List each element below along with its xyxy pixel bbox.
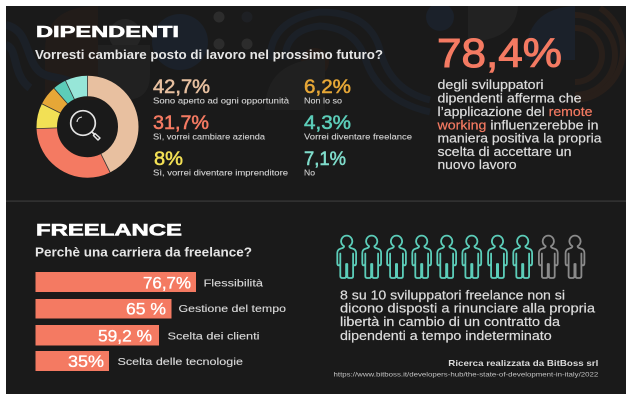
- stat: 31,7%: [153, 112, 266, 142]
- text block: freelance: dicono disposti a rinunciare alla propria: [340, 301, 596, 316]
- stat: 4,3%: [304, 112, 413, 142]
- text block: freelance: dipendenti a tempo indeterminato: [340, 328, 552, 343]
- text block: remote working: nuovo lavoro: [438, 157, 516, 172]
- stat: 6,2%: Non lo so: [304, 96, 343, 106]
- heading: question dipendenti: Vorresti cambiare posto di lavoro nel prossimo futuro?: [35, 48, 383, 62]
- stat: 31,7%: 31,7%: [153, 112, 209, 134]
- text block: remote working: degli sviluppatori: [438, 77, 544, 92]
- stat: 8%: Sì, vorrei diventare imprenditore: [153, 168, 289, 178]
- bar: Flessibilità: [36, 272, 264, 292]
- text block: freelance: 8 su 10 sviluppatori freelance non si: [340, 287, 565, 302]
- text block: freelance: [340, 287, 596, 343]
- stat: 7,1%: 7,1%: [304, 148, 346, 170]
- bar: Scelta dei clienti: 59,2 %: [98, 328, 152, 346]
- stat: 8%: [153, 148, 289, 178]
- bar: Gestione del tempo: [36, 299, 287, 318]
- text block: remote working: dipendenti afferma che: [438, 90, 582, 106]
- stat: 42,7%: 42,7%: [153, 76, 210, 98]
- text block: freelance: libertà in cambio di un contratto da: [340, 314, 561, 329]
- stat: 42,7%: Sono aperto ad ogni opportunità: [153, 96, 290, 106]
- icon: magnifying glass: [71, 111, 100, 140]
- credit: Ricerca realizzata da BitBoss srl: [448, 358, 598, 368]
- stat: 4,3%: Vorrei diventare freelance: [304, 132, 413, 142]
- bar: Scelta delle tecnologie: [36, 351, 244, 371]
- stat: 7,1%: No: [304, 168, 316, 178]
- text block: remote working: l’applicazione del remote: [438, 104, 592, 119]
- bar: Scelta delle tecnologie: 35%: [68, 353, 104, 371]
- title: Freelance: FREELANCE: [36, 222, 182, 240]
- text block: remote working: working influenzerebbe in: [436, 118, 598, 132]
- bar: Scelta dei clienti: [36, 325, 260, 346]
- title: Dipendenti: DIPENDENTI: [36, 24, 179, 41]
- stat: 6,2%: 6,2%: [304, 76, 351, 98]
- text block: remote working: maniera positiva la propria: [438, 130, 602, 146]
- stat: 42,7%: [153, 76, 290, 106]
- text block: remote working: [436, 77, 602, 172]
- text block: remote working: scelta di accettare un: [438, 144, 572, 159]
- stat: 31,7%: Sì, vorrei cambiare azienda: [153, 132, 266, 142]
- bar: Gestione del tempo: Gestione del tempo: [178, 304, 287, 315]
- bar: Gestione del tempo: 65 %: [126, 300, 166, 318]
- bar: Scelta delle tecnologie: Scelta delle tecnologie: [118, 357, 244, 368]
- source url: https://www.bitboss.it/developers-hub/the-state-of-development-in-italy/2022: [334, 372, 599, 379]
- bar: Scelta dei clienti: Scelta dei clienti: [168, 331, 260, 342]
- bar: Flessibilità: Flessibilità: [204, 279, 264, 290]
- stat: 8%: 8%: [154, 148, 183, 170]
- bar: Flessibilità: 76,7%: [143, 274, 191, 292]
- heading: question freelance: Perchè una carriera da freelance?: [35, 246, 252, 260]
- stat: 4,3%: 4,3%: [304, 112, 351, 134]
- donut chart: [36, 76, 128, 173]
- big number: 78,4%: 78,4%: [437, 30, 562, 76]
- pictogram: 8 su 10 sviluppatori: [337, 236, 584, 278]
